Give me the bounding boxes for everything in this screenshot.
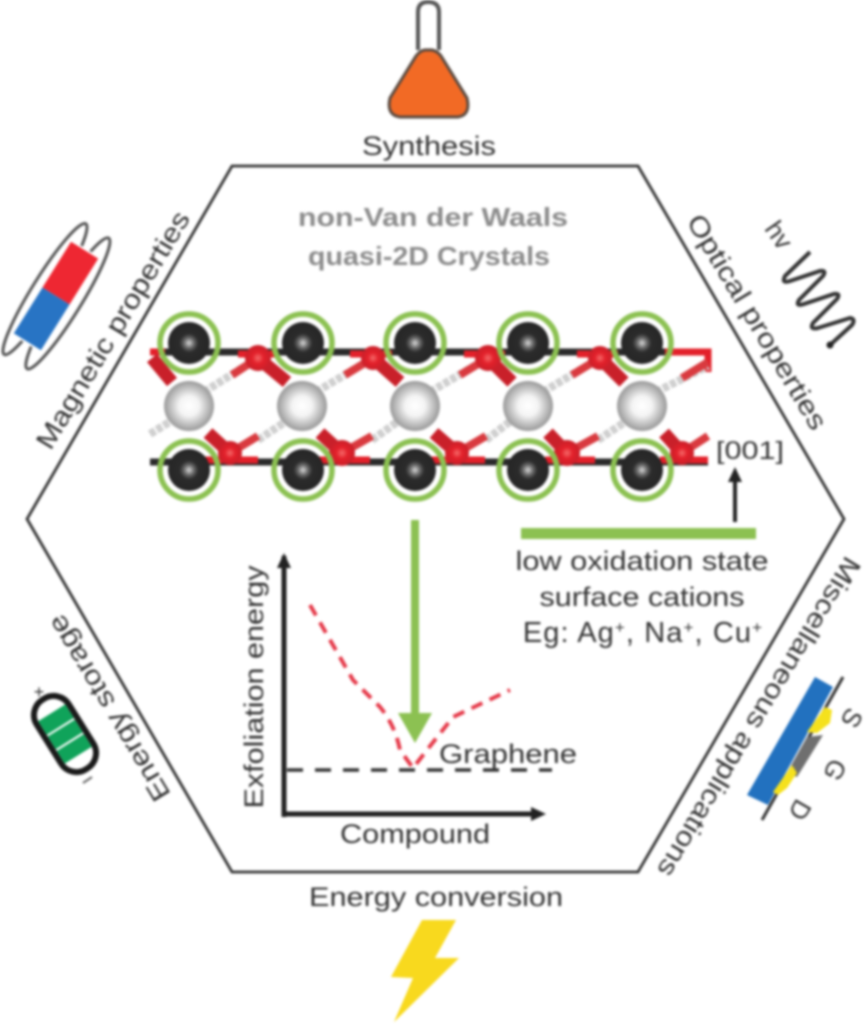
title <box>298 202 568 271</box>
icon: flask <box>389 2 468 117</box>
oxygen atoms <box>218 345 694 466</box>
legend text: + <box>752 618 763 637</box>
arrow: [001] direction <box>728 467 742 522</box>
icon: battery: + <box>34 682 44 702</box>
icon: transistor: D <box>782 794 818 826</box>
label: Energy storage: Energy storage <box>42 609 176 807</box>
green legend bar <box>521 528 756 539</box>
icon: battery <box>27 682 103 783</box>
label: Miscellaneous applications: Miscellaneous applications <box>651 552 865 882</box>
legend text: , Cu <box>695 617 752 649</box>
icon: lightning bolt <box>391 920 459 1022</box>
top black atoms <box>168 322 663 364</box>
label: Optical properties: Optical properties <box>681 209 833 435</box>
chart: exfoliation energy <box>239 553 577 849</box>
icon: magnet <box>0 217 119 375</box>
legend text: low oxidation state <box>516 546 768 576</box>
label: [001]: [001] <box>716 437 784 465</box>
axes <box>277 553 546 821</box>
label: Magnetic properties: Magnetic properties <box>30 206 196 454</box>
icon: transistor <box>747 677 865 826</box>
crystal structure <box>150 314 708 499</box>
dashed red curve <box>310 605 510 768</box>
legend text <box>516 546 768 649</box>
icon: light wave hv: hv <box>759 215 799 255</box>
title: quasi-2D Crystals <box>308 241 550 271</box>
grey atoms <box>164 381 667 431</box>
legend text: Eg: Ag <box>523 617 615 649</box>
green rings <box>160 314 671 499</box>
label: Synthesis: Synthesis <box>362 131 496 161</box>
hexagon frame <box>27 166 844 872</box>
legend text: , Na <box>626 617 684 649</box>
legend text: + <box>684 618 695 637</box>
label: Graphene: Graphene <box>439 739 577 769</box>
legend text: + <box>615 618 626 637</box>
bottom black atoms <box>168 449 663 491</box>
legend text: surface cations <box>540 582 744 612</box>
bonds <box>150 352 708 462</box>
arrow: green down <box>398 520 432 743</box>
icon: light wave hv <box>759 215 854 348</box>
label: Energy conversion: Energy conversion <box>309 882 563 912</box>
label: Exfoliation energy: Exfoliation energy <box>239 565 269 808</box>
dashed baseline <box>287 768 552 772</box>
icon: transistor: G <box>817 754 853 786</box>
label: Compound: Compound <box>340 819 490 849</box>
title: non-Van der Waals <box>298 202 568 232</box>
